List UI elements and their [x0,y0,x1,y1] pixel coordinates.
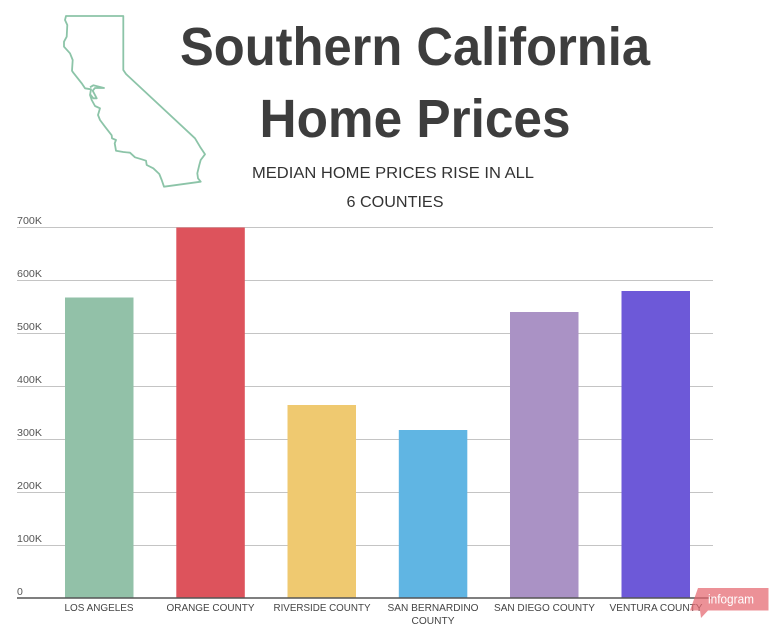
gridlines and y axis: 100K [17,533,42,545]
gridlines and y axis: 200K [17,480,42,492]
title [180,17,651,149]
gridlines and y axis: 300K [17,427,42,439]
gridlines and y axis: 400K [17,374,42,386]
x axis labels: LOS ANGELES [64,602,134,614]
subtitle: MEDIAN HOME PRICES RISE IN ALL [252,165,534,182]
gridlines and y axis: 500K [17,321,42,333]
bars [65,228,690,598]
gridlines and y axis: 700K [17,215,42,227]
x axis line [17,597,713,599]
x axis labels: SAN BERNARDINO [388,602,478,614]
gridlines and y axis: 600K [17,268,42,280]
gridlines and y axis [17,215,713,598]
x axis labels: ORANGE COUNTY [166,602,254,614]
x axis labels: SAN DIEGO COUNTY [494,602,595,614]
icon: California outline [64,16,205,187]
bar chart [17,215,713,626]
x axis labels: RIVERSIDE COUNTY [274,602,370,614]
subtitle: 6 COUNTIES [346,194,444,211]
infogram badge [690,588,768,618]
title: Home Prices [260,89,570,149]
x axis labels: VENTURA COUNTY [610,602,702,614]
infogram badge: infogram [708,592,754,606]
subtitle [252,165,534,211]
title: Southern California [180,17,651,77]
gridlines and y axis: 0 [17,586,23,598]
x axis labels [64,602,702,626]
